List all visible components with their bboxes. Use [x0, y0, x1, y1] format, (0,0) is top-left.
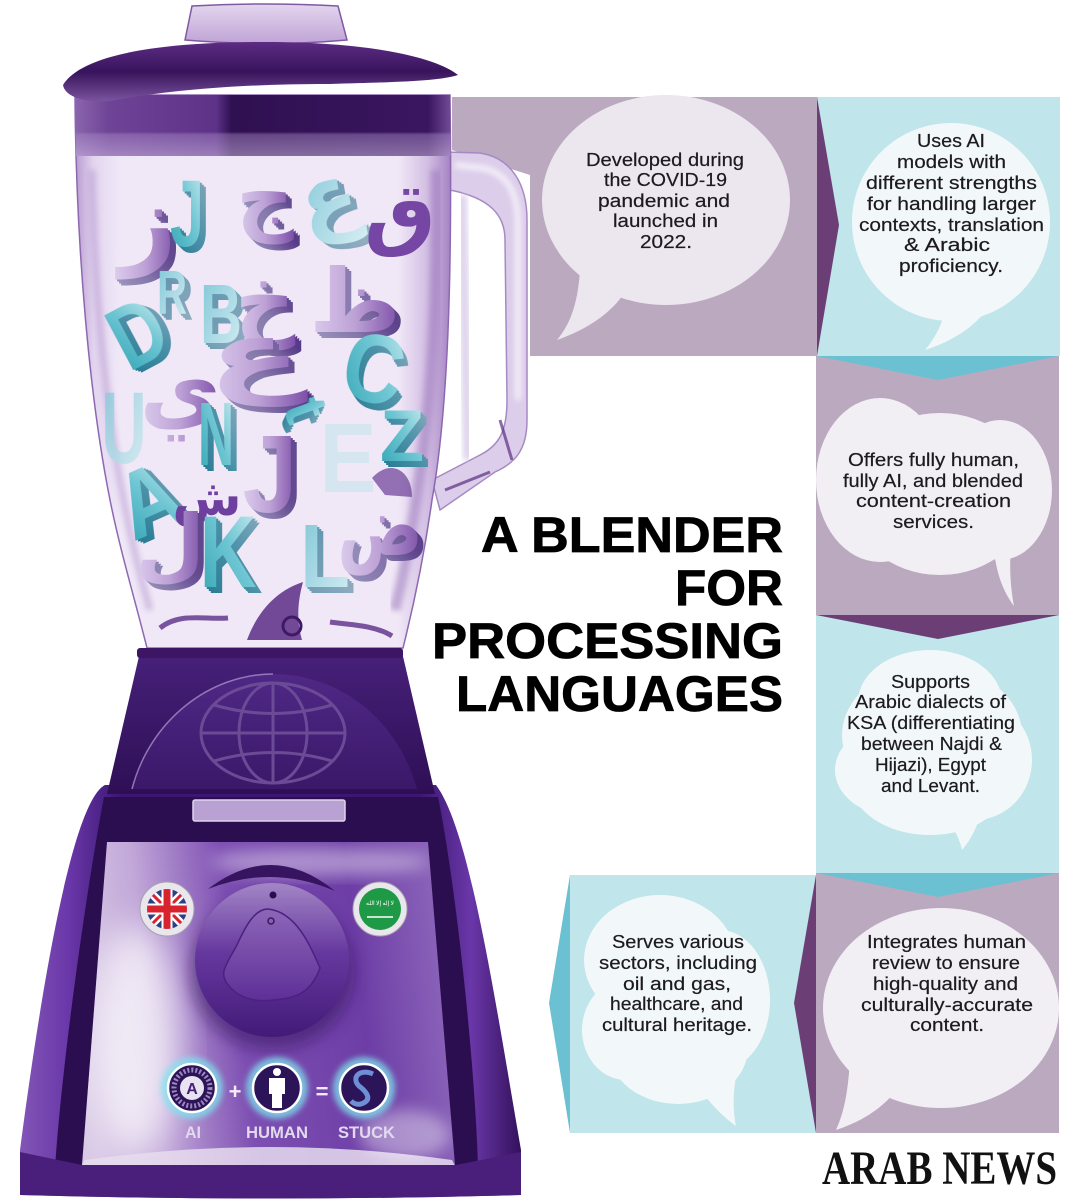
panel: human review [816, 873, 1059, 1133]
text: sectors: oil and gas, [623, 973, 731, 994]
chevron: teal lower down [816, 873, 1059, 897]
labels: AI, human, Stuck [185, 1123, 396, 1142]
text: sectors: healthcare, and [610, 993, 743, 1014]
bubble: dialects cloud [835, 650, 1032, 850]
title: PROCESSING [432, 613, 783, 669]
text: AI models [859, 130, 1044, 276]
floating letters: ش [172, 469, 242, 527]
floating letters: ز [114, 162, 177, 279]
text: AI models: different strengths [866, 172, 1037, 193]
text: sectors [599, 931, 757, 1035]
text: sectors: Serves various [612, 931, 744, 952]
floating letters: D [92, 277, 184, 390]
collar band [76, 95, 450, 156]
text: human review: content. [910, 1014, 984, 1035]
panel: content-creation services [816, 356, 1059, 615]
blender jug [63, 4, 527, 648]
floating letters: R [157, 259, 187, 328]
bubble: human review [823, 908, 1059, 1130]
text: sectors: sectors, including [599, 952, 757, 973]
text: AI models: proficiency. [899, 255, 1003, 276]
floating letters: ع [208, 302, 308, 407]
blender base [20, 648, 521, 1198]
icon: Stuck logo [333, 1057, 395, 1119]
chevron: teal left [549, 875, 570, 1133]
floating letters: ض [338, 477, 422, 576]
motor body [20, 785, 521, 1198]
floating letters: J [170, 161, 204, 267]
floating letters: t [270, 388, 341, 431]
text: AI models: models with [897, 151, 1006, 172]
panel: Arabic dialects [816, 615, 1059, 873]
text: dialects: between Najdi & [861, 733, 1003, 754]
floating letters: ل [135, 498, 205, 591]
floating letters: E [320, 403, 376, 513]
chevron: teal down [816, 356, 1059, 380]
plus sign: + [229, 1079, 241, 1104]
icon: human [246, 1057, 308, 1119]
bubble: sectors cloud [582, 895, 770, 1126]
chevron: purple right [817, 97, 839, 356]
text: developed during COVID: launched in [613, 210, 718, 231]
text: services: services. [893, 511, 974, 532]
flag: Saudi Arabia [353, 882, 407, 936]
dial arc [208, 865, 335, 891]
equals sign: = [316, 1079, 328, 1104]
text: AI models: Uses AI [917, 130, 985, 151]
text: services [843, 449, 1023, 532]
jug glass [75, 95, 451, 648]
dark frame [55, 797, 478, 1168]
text: developed during COVID: 2022. [640, 231, 692, 252]
floating letters: ج [236, 151, 294, 245]
neck with globe [107, 648, 435, 794]
text: developed during COVID: pandemic and [598, 190, 730, 211]
floating letters: L [300, 507, 350, 607]
floating letters: A [99, 439, 198, 560]
chevron: purple down [816, 615, 1059, 639]
floating letters: B [200, 267, 242, 361]
floating letters: K [200, 495, 256, 609]
text: AI models: contexts, translation [859, 214, 1044, 235]
floating letters: ي [140, 338, 220, 441]
floating letters: Z [380, 396, 424, 477]
floating letters: ظ [309, 250, 401, 353]
panel: sectors [549, 875, 816, 1133]
bubble: cloud [816, 398, 1052, 606]
icon: AI: A [186, 1081, 198, 1098]
labels: AI, human, Stuck: STUCK [338, 1123, 396, 1142]
bubble: developed during COVID [542, 95, 790, 340]
text: sectors: cultural heritage. [602, 1014, 752, 1035]
text: developed during COVID: Developed during [586, 149, 744, 170]
floating letters: ع [291, 142, 370, 250]
text: human review [861, 931, 1033, 1035]
lid [63, 42, 458, 101]
floating letters: N [198, 385, 234, 485]
flag: UK [140, 882, 194, 936]
text: AI models: & Arabic [904, 234, 990, 255]
floating letters: ق [364, 166, 436, 259]
jug handle [432, 152, 527, 510]
panel: AI models [817, 97, 1060, 356]
text: dialects: Supports [891, 671, 970, 692]
text: human review: culturally-accurate [861, 994, 1033, 1015]
floating letters: خ [235, 252, 296, 351]
text: human review: high-quality and [873, 973, 1018, 994]
text: services: Offers fully human, [848, 449, 1019, 470]
text: services: fully AI, and blended [843, 470, 1023, 491]
text: human review: review to ensure [872, 952, 1020, 973]
dial knob [190, 883, 354, 1050]
control panel [80, 842, 456, 1168]
text: developed during COVID [586, 149, 744, 252]
floating letters: J [242, 413, 298, 536]
title: FOR [675, 560, 783, 616]
text: developed during COVID: the COVID-19 [604, 169, 727, 190]
labels: AI, human, Stuck: HUMAN [246, 1123, 308, 1142]
text: AI models: for handling larger [867, 193, 1036, 214]
floating letters: U [102, 371, 146, 485]
title [432, 507, 783, 722]
text: dialects: KSA (differentiating [847, 712, 1015, 733]
floating letters [92, 142, 436, 609]
text: dialects: Hijazi), Egypt [875, 754, 986, 775]
text: dialects [847, 671, 1015, 796]
title: LANGUAGES [456, 666, 783, 722]
bubble: AI models [852, 123, 1050, 350]
text: dialects: and Levant. [881, 775, 980, 796]
silver bar [193, 800, 345, 821]
title: A BLENDER [481, 507, 783, 563]
icon: AI [161, 1057, 223, 1119]
chevron: purple left [794, 875, 816, 1133]
lid knob [185, 4, 347, 44]
text: dialects: Arabic dialects of [855, 691, 1007, 712]
flag: Saudi Arabia: لا إله إلا الله [366, 898, 394, 907]
icon: globe [201, 683, 345, 783]
text: services: content-creation [856, 490, 1011, 511]
panel: developed during COVID [452, 95, 817, 356]
labels: AI, human, Stuck: AI [185, 1123, 201, 1142]
body bottom band [20, 1152, 521, 1198]
floating letters: C [333, 309, 415, 428]
text: human review: Integrates human [867, 931, 1026, 952]
